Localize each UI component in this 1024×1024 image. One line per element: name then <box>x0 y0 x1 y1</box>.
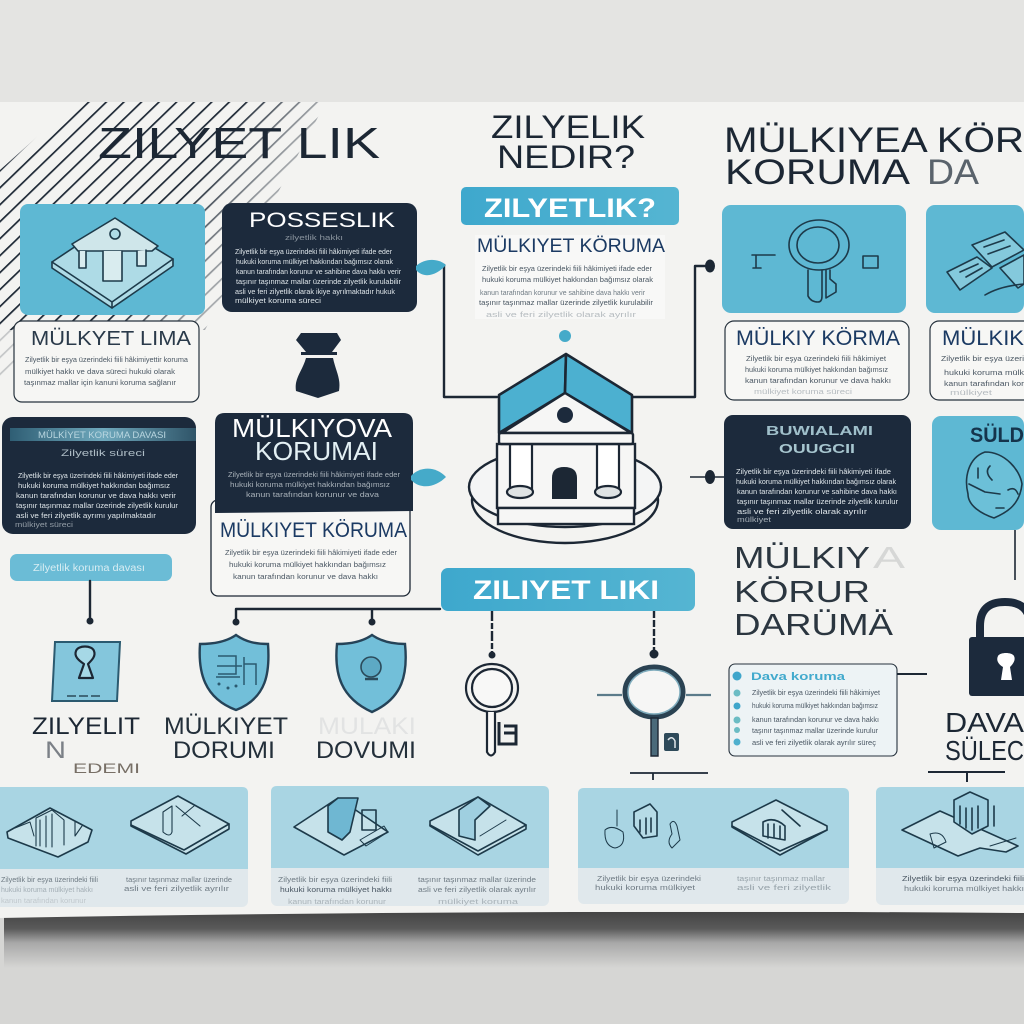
panel: dark info card: hukuki koruma mülkiyet hakkından bağımsız <box>18 481 170 490</box>
text block: Mülkiya Korur Darümä <box>734 540 905 642</box>
text block: Mülkiyet Koruma: Zilyetlik bir eşya üzerindeki fiili hâkimiyeti ifade eder <box>482 264 652 273</box>
panel: Possesslik: hukuki koruma mülkiyet hakkından bağımsız olarak <box>236 257 393 266</box>
label: Zilyelit <box>32 713 140 776</box>
panel: dark info card: taşınır taşınmaz mallar üzerinde zilyetlik kurulur <box>16 501 179 510</box>
diagonal hatch decoration <box>0 102 326 330</box>
heading: Mülkiyea Koruma: MÜLKIYEA KÖR <box>724 121 1024 160</box>
icon: keyhole square <box>52 642 120 701</box>
label: Dovumi: DOVUMI <box>316 737 416 764</box>
heading: Zilyelik Nedir <box>491 109 645 175</box>
panel: Mülkiy Koma <box>725 321 909 400</box>
bottom panel 4: Zilyetlik bir eşya üzerindeki fiili <box>902 874 1024 883</box>
bottom panel 3: asli ve feri zilyetlik <box>737 885 832 892</box>
icon: shield with plan <box>200 635 268 710</box>
icon: diamond building one <box>7 808 92 857</box>
panel: Mülkiyova Korumai: Zilyetlik bir eşya üzerindeki fiili hâkimiyeti ifade eder <box>225 548 397 557</box>
panel: blue building card <box>20 204 205 315</box>
bottom panel 1: taşınır taşınmaz mallar üzerinde <box>126 877 232 884</box>
panel: dark Buwialami card: BUWIALAMI <box>766 423 873 438</box>
panel: Mülkiy Koma: MÜLKIY KÖRMA <box>736 327 900 350</box>
panel: Mülkyet Lima <box>14 321 199 402</box>
panel: Mülkiyova Korumai <box>211 413 413 596</box>
icon: diamond with building <box>902 792 1018 856</box>
panel: Mülkiyova Korumai: MÜLKIYET KÖRUMA <box>220 519 407 542</box>
label: Mülkiyet Dorumi: MÜLKIYET <box>164 713 288 740</box>
label: Dovumi: MULAKI <box>318 713 416 740</box>
bottom panel 1: asli ve feri zilyetlik ayrılır <box>124 886 230 893</box>
panel: Mülkiyova Korumai: hukuki koruma mülkiyet hakkından bağımsız <box>229 560 386 569</box>
icon: isometric building <box>52 218 173 308</box>
panel: dark info card: mülkiyet süreci <box>15 520 73 529</box>
connector: Süld down to lock <box>1014 530 1016 580</box>
panel: bullet list: Dava koruma <box>751 671 846 683</box>
panel: Possesslik: asli ve feri zilyetlik olarak ikiye ayrılmaktadır hukuk <box>235 287 395 296</box>
connector: house to right card <box>632 260 715 397</box>
panel: dark Buwialami card: hukuki koruma mülkiyet hakkından bağımsız olarak <box>736 477 896 486</box>
panel: Mülki partial card: mülkiyet <box>950 390 992 397</box>
panel: bullet list: taşınır taşınmaz mallar üzerinde kurulur <box>752 726 878 735</box>
panel: Mülkyet Lima: taşınmaz mallar için kanuni koruma sağlanır <box>24 378 177 387</box>
bottom panel 1 <box>0 787 248 907</box>
bottom panel 1: hukuki koruma mülkiyet hakkı <box>1 887 93 894</box>
text block: Mülkiya Korur Darümä: MÜLKIY <box>734 540 870 575</box>
bottom panel 2: mülkiyet koruma <box>438 899 518 906</box>
icon: documents <box>947 232 1024 295</box>
panel: Mülkiy Koma: hukuki koruma mülkiyet hakkından bağımsız <box>745 365 888 374</box>
icon: small objects <box>605 804 680 848</box>
panel: blue documents card <box>926 205 1024 313</box>
text block: Mülkiyet Koruma: MÜLKIYET KÖRUMA <box>477 236 665 257</box>
panel: Mülkyet Lima: mülkiyet hakkı ve dava süreci hukuki olarak <box>25 367 175 376</box>
icon: central house on pedestal <box>469 354 661 543</box>
panel: dark info card <box>2 417 196 534</box>
panel: dark info card: kanun tarafından korunur ve dava hakkı verir <box>16 491 177 500</box>
panel: bullet list <box>729 664 897 756</box>
infographic sheet <box>0 102 1024 918</box>
panel: Possesslik: Zilyetlik bir eşya üzerindeki fiili hâkimiyeti ifade eder <box>235 247 392 256</box>
icon: teal leaf connector <box>411 469 446 486</box>
panel: Possesslik <box>222 203 417 312</box>
label: Dava Süreci <box>945 707 1024 766</box>
bottom panel 3: Zilyetlik bir eşya üzerindeki <box>597 876 702 883</box>
label: Zilyelit: EDEMI <box>73 760 140 776</box>
bottom panel 2: Zilyetlik bir eşya üzerindeki fiili <box>278 877 393 884</box>
panel: Mülkiy Koma: Zilyetlik bir eşya üzerindeki fiili hâkimiyet <box>746 354 887 363</box>
panel: Mülkiyova Korumai: MÜLKIYOVA <box>232 413 393 443</box>
panel: Mülkiyova Korumai: Zilyetlik bir eşya üzerindeki fiili hâkimiyeti ifade eder <box>228 470 400 479</box>
bottom panel 3: hukuki koruma mülkiyet <box>595 885 695 892</box>
text block: Mülkiyet Koruma: hukuki koruma mülkiyet hakkından bağımsız olarak <box>482 275 653 284</box>
bottom panel 4 <box>876 787 1024 905</box>
panel: Possesslik: POSSESLIK <box>249 209 395 232</box>
panel: Mülkiy Koma: mülkiyet koruma süreci <box>754 389 853 396</box>
heading: Mülkiyea Koruma: KORUMA <box>725 153 911 192</box>
bottom panel 2: kanun tarafından korunur <box>288 899 387 906</box>
panel: Mülki partial card: MÜLKIK <box>942 327 1024 350</box>
panel: blue key card <box>722 205 906 313</box>
text block: Mülkiya Korur Darümä: DARÜMÄ <box>734 607 893 642</box>
panel: bullet list: Zilyetlik bir eşya üzerindeki fiili hâkimiyet <box>752 688 881 697</box>
lower background <box>0 912 1024 1024</box>
bottom panel 4: hukuki koruma mülkiyet hakkı <box>904 886 1024 893</box>
panel: dark Buwialami card: mülkiyet <box>737 515 772 524</box>
text block: Mülkiyet Koruma: taşınır taşınmaz mallar üzerinde zilyetlik kurulabilir <box>479 298 654 307</box>
panel: Possesslik: taşınır taşınmaz mallar üzerinde zilyetlik kurulabilir <box>236 277 401 286</box>
heading: Zilyelik Nedir: ZILYELIK <box>491 109 645 145</box>
teal pill label: Zilyetlik koruma davası <box>33 563 145 574</box>
icon: diamond archive <box>732 800 827 855</box>
text block: Mülkiya Korur Darümä: A <box>873 540 905 575</box>
label: Mülkiyet Dorumi <box>164 713 288 764</box>
panel: Mülki partial card: Zilyetlik bir eşya üzeri <box>941 354 1024 363</box>
panel: Possesslik: mülkiyet koruma süreci <box>235 296 321 305</box>
heading: Zilyelik Nedir: NEDIR? <box>497 139 635 175</box>
bottom panel 3 <box>578 788 849 904</box>
label: Dava Süreci: DAVA <box>945 707 1024 738</box>
bottom panel 3: taşınır taşınmaz mallar <box>737 876 826 883</box>
icon: key <box>752 220 878 302</box>
text block: Mülkiya Korur Darümä: KÖRUR <box>734 574 870 609</box>
panel: dark Buwialami card: asli ve feri zilyetlik olarak ayrılır <box>737 507 868 516</box>
teal pill label <box>10 554 172 581</box>
connector: node to dark card <box>690 470 724 484</box>
panel: blue Süld card <box>932 416 1024 530</box>
panel: dark info card: asli ve feri zilyetlik ayrımı yapılmaktadır <box>16 511 157 520</box>
bottom panel 1: Zilyetlik bir eşya üzerindeki fiili <box>1 877 98 884</box>
divider tick right <box>928 772 1005 782</box>
title: Zilyet Lik: ZILYET LIK <box>98 119 380 168</box>
panel: Mülkyet Lima: Zilyetlik bir eşya üzerindeki fiili hâkimiyettir koruma <box>25 355 189 364</box>
panel: Possesslik: kanun tarafından korunur ve sahibine dava hakkı verir <box>236 267 401 276</box>
panel: Mülkiyova Korumai: kanun tarafından korunur ve dava <box>246 490 380 499</box>
icon: diamond house one <box>294 798 388 855</box>
icon: padlock <box>969 602 1024 696</box>
icon: shield with lock <box>336 635 406 712</box>
panel: Mülki partial card: kanun tarafından kor <box>944 379 1024 388</box>
panel: Possesslik: zilyetlik hakkı <box>285 233 343 242</box>
connector: list to lock <box>897 673 927 675</box>
center banner: Ziliyet Liki <box>441 568 695 611</box>
heading panel: Zilyetlik?: ZILYETLIK? <box>484 193 656 223</box>
panel: dark Buwialami card <box>724 415 911 529</box>
bottom panel 2: taşınır taşınmaz mallar üzerinde <box>418 877 536 884</box>
panel: dark Buwialami card: kanun tarafından korunur ve sahibine dava hakkı <box>737 487 897 496</box>
panel: dark Buwialami card: Zilyetlik bir eşya üzerindeki fiili hâkimiyeti ifade <box>736 467 891 476</box>
panel: dark info card: Zilyetlik süreci <box>61 448 145 458</box>
connector: pill to keyhole <box>86 581 94 624</box>
bottom panel 2 <box>271 786 549 906</box>
panel: Mülkiyova Korumai: hukuki koruma mülkiyet hakkından bağımsız <box>230 480 390 489</box>
center banner: Ziliyet Liki: ZILIYET LIKI <box>473 575 659 605</box>
panel: bullet list: asli ve feri zilyetlik olarak ayrılır süreç <box>752 738 876 747</box>
icon: diamond building two <box>131 796 229 854</box>
label: Zilyelit: ZILYELIT <box>32 713 140 740</box>
connector: left leaf to house <box>416 260 497 397</box>
sheet shadow <box>4 912 1024 968</box>
divider tick <box>630 773 708 780</box>
heading: Mülkiyea Koruma: DA <box>927 153 980 192</box>
bottom panel 1: kanun tarafından korunur <box>1 898 87 905</box>
panel: Mülkyet Lima: MÜLKYET LIMA <box>31 328 192 350</box>
panel: dark Buwialami card: OUUGCII <box>779 441 855 456</box>
icon: key right <box>597 611 711 756</box>
panel: Mülki partial card <box>930 321 1024 400</box>
icon: teal drop <box>559 330 571 342</box>
icon: sketched map circle <box>967 452 1022 518</box>
connector: bracket to shields <box>232 609 440 626</box>
text block: Mülkiyet Koruma: asli ve feri zilyetlik olarak ayrılır <box>486 312 637 319</box>
label: Mülkiyet Dorumi: DORUMI <box>173 737 275 764</box>
text block: Mülkiyet Koruma: kanun tarafından korunur ve sahibine dava hakkı verir <box>480 290 646 297</box>
panel: dark Buwialami card: taşınır taşınmaz mallar üzerinde zilyetlik kurulur <box>737 497 898 506</box>
label: Zilyelit: N <box>45 737 66 764</box>
panel: bullet list: kanun tarafından korunur ve dava hakkı <box>752 715 879 724</box>
text block: Mülkiyet Koruma <box>475 235 665 319</box>
bottom panel 2: asli ve feri zilyetlik olarak ayrılır <box>418 887 537 894</box>
panel: bullet list: hukuki koruma mülkiyet hakkından bağımsız <box>752 701 878 710</box>
panel: dark info card: MÜLKİYET KORUMA DAVASI <box>38 430 166 440</box>
icon: money bag <box>296 333 341 398</box>
panel: Mülki partial card: hukuki koruma mülk <box>944 368 1024 377</box>
panel: Mülkiy Koma: kanun tarafından korunur ve dava hakkı <box>745 376 891 385</box>
panel: dark info card: Zilyetlik bir eşya üzerindeki fiili hâkimiyeti ifade eder <box>18 471 178 480</box>
icon: key left <box>466 611 518 756</box>
label: Dovumi <box>316 713 416 764</box>
panel: Mülkiyova Korumai: KORUMAI <box>255 436 378 466</box>
panel: Mülkiyova Korumai: kanun tarafından korunur ve dava hakkı <box>233 572 378 581</box>
heading panel: Zilyetlik? <box>461 187 679 225</box>
bottom panel 2: hukuki koruma mülkiyet hakkı <box>280 885 392 894</box>
icon: diamond house two <box>430 797 526 855</box>
heading: Mülkiyea Koruma <box>724 121 1024 192</box>
